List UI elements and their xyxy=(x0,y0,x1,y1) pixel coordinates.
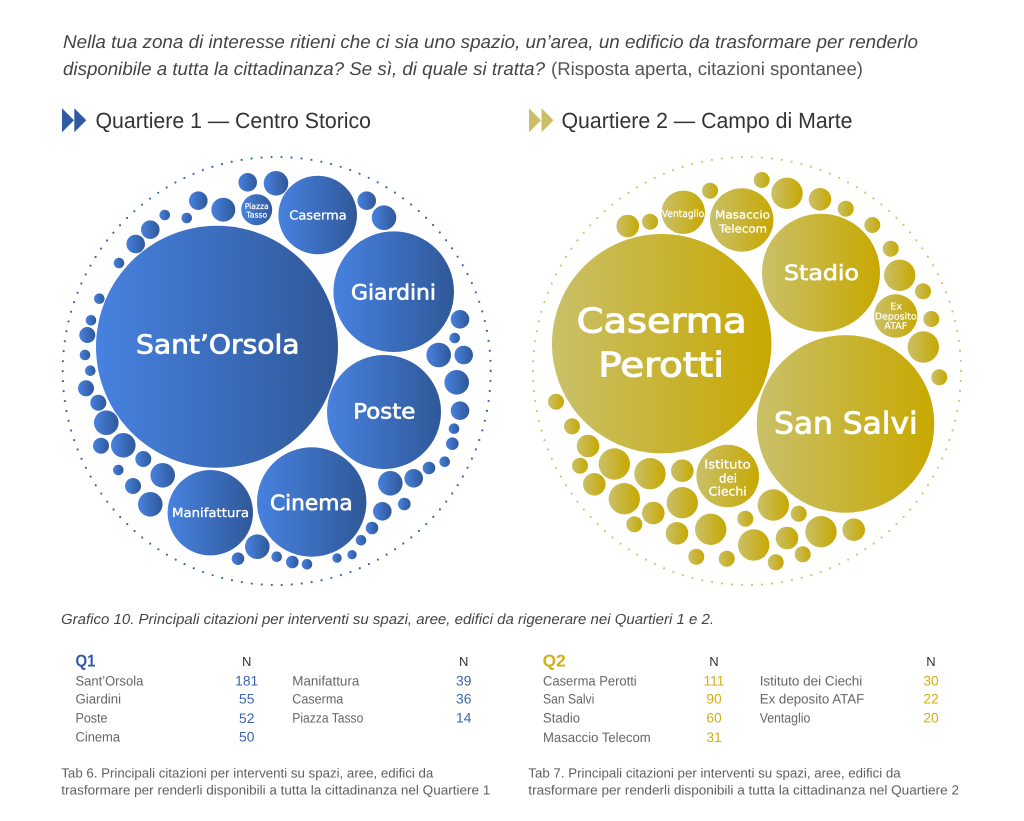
table: Q1: 181 xyxy=(235,673,258,688)
table: Q2: San Salvi xyxy=(543,692,594,707)
bubble: Caserma xyxy=(278,176,357,254)
table: Q2: N xyxy=(926,654,936,669)
table: Q1: 14 xyxy=(456,710,472,726)
heading: Quartiere 2: Quartiere 2 — Campo di Marte xyxy=(562,108,852,133)
bubble: Sant'Orsola xyxy=(96,226,338,468)
bubble: Stadio xyxy=(762,214,880,332)
table: Q1: 50 xyxy=(239,730,255,744)
table: Q2: 31 xyxy=(706,730,722,745)
chart caption: Grafico 10. Principali citazioni per interventi su spazi, aree, edifici da rigenerare nei Quartieri 1 e 2. xyxy=(61,612,714,628)
table: Q2: 90 xyxy=(706,692,722,707)
bubble: Poste: Poste xyxy=(353,399,415,423)
table note: Tab 7 xyxy=(528,765,959,797)
table: Q1: N xyxy=(459,654,468,669)
bubble: Ventaglio: Ventaglio xyxy=(662,209,704,220)
table: Q1: Caserma xyxy=(292,692,344,707)
bubble: Stadio: Stadio xyxy=(784,261,859,285)
bubble: Cinema: Cinema xyxy=(270,491,353,515)
bubble: San Salvi xyxy=(757,335,934,513)
bubble: Sant'Orsola: Sant’Orsola xyxy=(136,330,300,360)
table: Q2: 60 xyxy=(706,711,722,726)
table: Q1: Poste xyxy=(76,710,108,726)
bubble: Masaccio Telecom: Telecom xyxy=(718,222,767,235)
table: Q1: Sant’Orsola xyxy=(76,673,144,688)
bubble: Piazza Tasso xyxy=(241,194,272,225)
bubble: Poste xyxy=(327,355,441,469)
table: Q2: 30 xyxy=(923,673,939,688)
bubble: Istituto dei Ciechi: Ciechi xyxy=(709,484,747,498)
table: Q2: 20 xyxy=(923,711,939,726)
table note: Tab 7: Tab 7. Principali citazioni per interventi su spazi, aree, edifici da xyxy=(528,765,901,780)
table: Q2: Masaccio Telecom xyxy=(543,730,651,745)
table: Q2: Stadio xyxy=(543,711,580,726)
table: Q2: Ex deposito ATAF xyxy=(760,692,864,707)
table: Q1 xyxy=(76,652,472,744)
table: Q1: 52 xyxy=(239,711,254,726)
bubble: Caserma Perotti xyxy=(552,234,771,453)
heading: Quartiere 1: Quartiere 1 — Centro Storico xyxy=(96,108,371,133)
bubble: Cinema xyxy=(257,447,366,557)
title: survey question xyxy=(63,31,918,79)
bubble: Giardini xyxy=(333,231,454,352)
bubble: Ex Deposito ATAF: Ex xyxy=(890,302,902,313)
small unnamed bubbles Q2 xyxy=(548,172,947,570)
bubble chart: Quartiere 1 xyxy=(63,157,491,585)
bubble chart: Quartiere 2 xyxy=(533,157,961,585)
table: Q1: Piazza Tasso xyxy=(292,710,363,726)
bubble: Caserma: Caserma xyxy=(289,207,347,222)
table: Q1: 55 xyxy=(239,692,255,707)
bubble: Giardini: Giardini xyxy=(351,280,436,304)
bubble: Ventaglio xyxy=(662,191,705,234)
small unnamed bubbles Q1 xyxy=(78,171,473,570)
table: Q2: Ventaglio xyxy=(760,711,810,726)
table: Q1: Q1 xyxy=(76,652,96,670)
table: Q2: N xyxy=(709,654,719,669)
table: Q1: Cinema xyxy=(76,730,120,744)
bubble: Piazza Tasso: Tasso xyxy=(245,211,267,220)
title: survey question: disponibile a tutta la cittadinanza? Se sì, di quale si tratta? xyxy=(63,58,546,79)
table note: Tab 6 xyxy=(61,765,490,797)
table: Q2: Q2 xyxy=(543,652,566,670)
title: survey question: (Risposta aperta, citazioni spontanee) xyxy=(551,58,863,79)
table: Q1: N xyxy=(242,654,251,669)
table: Q2: Istituto dei Ciechi xyxy=(760,673,862,688)
bubble: Ex Deposito ATAF: Deposito xyxy=(875,311,917,322)
table: Q1: Manifattura xyxy=(292,673,360,688)
table: Q1: 39 xyxy=(456,673,472,688)
table: Q1: Giardini xyxy=(76,692,121,707)
bubble: Istituto dei Ciechi: Istituto xyxy=(704,458,751,472)
table: Q2: 22 xyxy=(923,692,939,707)
bubble: Manifattura xyxy=(168,470,253,555)
bubble: Istituto dei Ciechi: dei xyxy=(719,471,737,485)
table note: Tab 6: trasformare per renderli disponibili a tutta la cittadinanza nel Quartiere 1 xyxy=(61,782,490,797)
bubble: Piazza Tasso: Piazza xyxy=(245,202,269,211)
bubble: Ex Deposito ATAF xyxy=(874,294,917,338)
bubble: San Salvi: San Salvi xyxy=(774,406,918,441)
bubble: Masaccio Telecom xyxy=(710,188,773,252)
table: Q2 xyxy=(543,652,939,745)
table note: Tab 7: trasformare per renderli disponibili a tutta la cittadinanza nel Quartiere 2 xyxy=(528,782,959,797)
table: Q2: Caserma Perotti xyxy=(543,673,637,688)
bubble: Ex Deposito ATAF: ATAF xyxy=(884,321,907,332)
bubble: Istituto dei Ciechi xyxy=(696,445,759,507)
bubble: Manifattura: Manifattura xyxy=(172,505,249,520)
bubble: Masaccio Telecom: Masaccio xyxy=(715,208,770,221)
table: Q2: 111 xyxy=(704,673,724,688)
title: survey question: Nella tua zona di interesse ritieni che ci sia uno spazio, un’area, un edificio da trasformare per renderlo xyxy=(63,31,918,52)
table note: Tab 6: Tab 6. Principali citazioni per interventi su spazi, aree, edifici da xyxy=(61,765,434,780)
table: Q1: 36 xyxy=(456,692,472,707)
bubble: Caserma Perotti: Caserma xyxy=(577,302,747,342)
bubble: Caserma Perotti: Perotti xyxy=(598,346,724,386)
